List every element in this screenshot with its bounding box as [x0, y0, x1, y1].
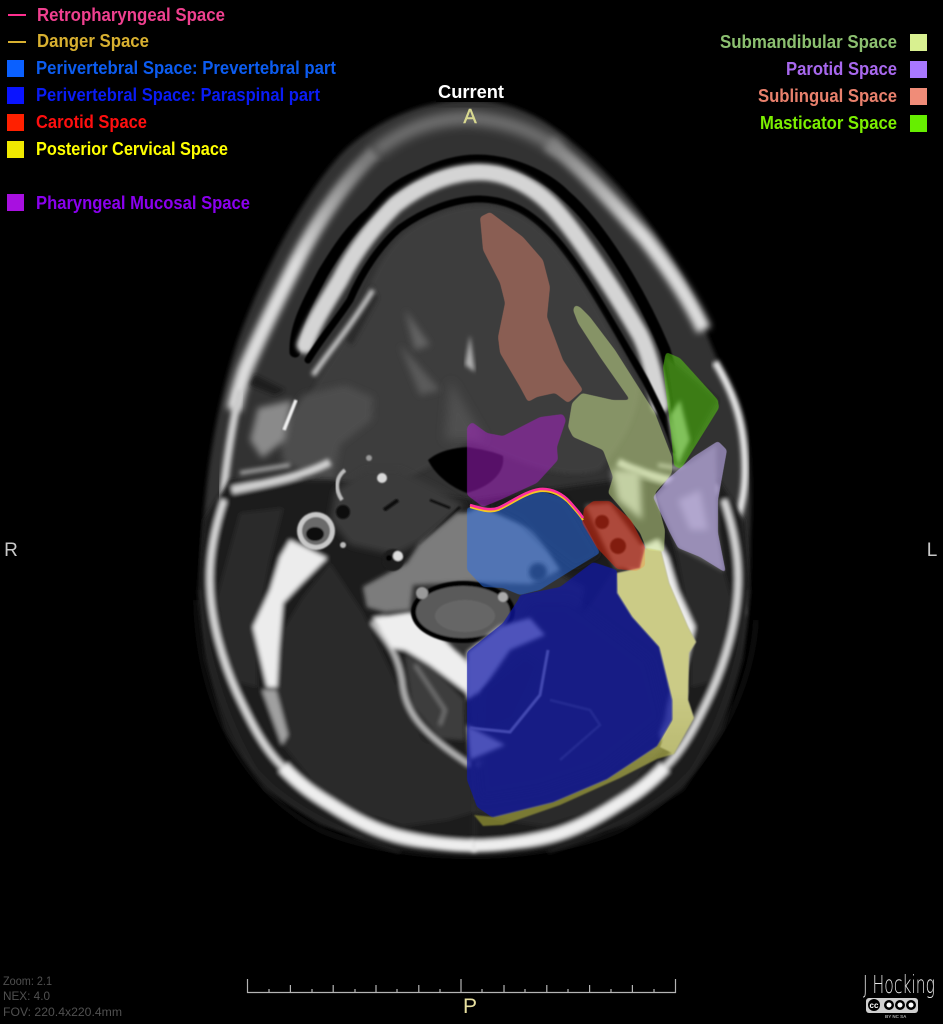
retropharyngeal space line	[470, 489, 583, 518]
mandible outer cortex	[295, 160, 678, 445]
acquisition details: Zoom: 2.1	[3, 974, 52, 988]
orientation marker: right: R	[4, 540, 18, 561]
legend item: carotid space: Carotid Space	[36, 112, 147, 132]
lower half of neck, left	[198, 462, 476, 852]
acquisition details	[3, 974, 122, 1019]
parapharyngeal and retropharyngeal tissue	[330, 455, 465, 555]
overlay: posterior cervical space	[474, 548, 696, 826]
licence badge: cc	[870, 1001, 879, 1010]
dark prevertebral tissue under overlay	[490, 490, 600, 568]
tongue midline septum highlights	[345, 285, 485, 440]
vertebral artery	[382, 549, 404, 571]
legend item: submandibular space: Submandibular Space	[720, 32, 897, 52]
overlay: carotid space	[582, 501, 645, 571]
legend item: parotid space: Parotid Space	[786, 59, 897, 79]
masseter region	[280, 385, 373, 480]
overlay: submandibular space	[568, 305, 672, 552]
overlay: parotid space	[653, 441, 727, 573]
orientation marker: left: L	[927, 540, 937, 561]
spinal canal and cord	[411, 581, 515, 643]
orientation marker: posterior: P	[463, 995, 477, 1018]
danger space line	[470, 491, 583, 520]
legend item: pharyngeal mucosal space: Pharyngeal Mucosal Space	[36, 193, 250, 213]
overlay: masticator space	[663, 352, 719, 469]
overlay: pharyngeal mucosal space	[467, 414, 566, 507]
legend: neck spaces, right	[720, 32, 927, 133]
lower half of neck, right (under overlays)	[472, 462, 750, 852]
overlay: sublingual space	[480, 212, 583, 403]
tongue and floor of mouth	[294, 205, 640, 492]
inner bright streak, left	[313, 290, 373, 375]
pharyngeal airway	[428, 447, 503, 493]
orientation marker: anterior: A	[463, 106, 477, 128]
licence badge	[866, 998, 918, 1019]
subcutaneous fat band, left	[234, 152, 375, 410]
anatomical space overlays	[467, 212, 727, 826]
legend item: danger space: Danger Space	[37, 31, 149, 51]
legend item: masticator space: Masticator Space	[760, 113, 897, 133]
subcutaneous fat band, crown	[375, 118, 560, 152]
vertebra	[363, 506, 560, 612]
acquisition details: FOV: 220.4x220.4mm	[3, 1005, 122, 1019]
mandible marrow	[305, 172, 660, 405]
licence badge: BY NC SA	[885, 1014, 907, 1019]
subcutaneous fat band, right	[548, 143, 704, 330]
legend item: prevertebral part: Perivertebral Space: Prevertebral part	[36, 58, 336, 78]
scale bar	[247, 979, 676, 993]
legend: neck spaces, left	[7, 5, 336, 213]
buccal fat and vessels	[250, 375, 296, 458]
carotid artery, right of patient	[297, 512, 335, 550]
underlying tissue highlights	[467, 355, 724, 800]
legend item: posterior cervical space: Posterior Cervical Space	[36, 139, 228, 159]
head silhouette	[201, 100, 751, 854]
current series label: Current	[438, 82, 504, 102]
acquisition details: NEX: 4.0	[3, 989, 50, 1003]
overlay: perivertebral space, paraspinal part	[467, 562, 673, 818]
overlay: perivertebral space, prevertebral part	[467, 491, 600, 595]
faint motion ghost ring	[196, 600, 756, 856]
mandible inner cortex	[308, 199, 675, 450]
legend item: sublingual space: Sublingual Space	[758, 86, 897, 106]
legend item: paraspinal part: Perivertebral Space: Paraspinal part	[36, 85, 320, 105]
MRI axial slice of the neck	[196, 100, 756, 856]
legend item: retropharyngeal space: Retropharyngeal Space	[37, 5, 225, 25]
